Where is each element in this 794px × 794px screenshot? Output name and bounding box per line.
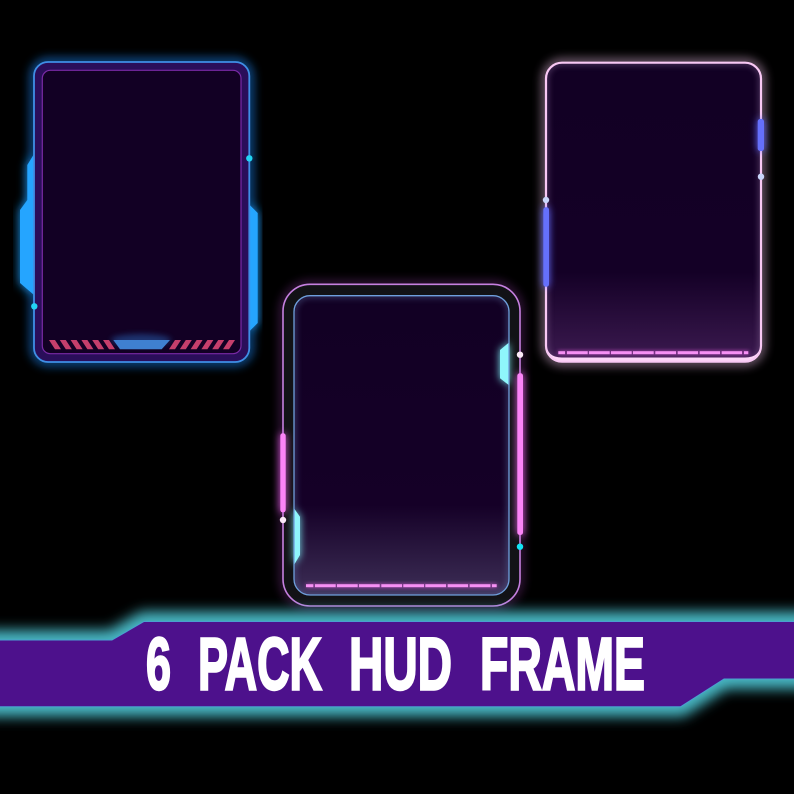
frame 2 left bar	[280, 433, 286, 512]
frame 3 dashed bottom line	[558, 351, 749, 354]
banner title text: FRAME	[480, 622, 645, 706]
frame 2 cyan left tab	[294, 508, 300, 565]
frame 1 centre bottom plate	[111, 334, 171, 349]
frame 2 cyan right tab	[500, 343, 509, 385]
frame 3 body	[546, 63, 761, 362]
frame 3 outline	[546, 63, 761, 362]
frame 1 left dot	[31, 303, 38, 309]
frame 3 left bar	[543, 207, 549, 287]
banner title text: HUD	[349, 622, 452, 706]
frame 1 body	[34, 62, 249, 362]
frame 1 outer glow	[34, 62, 249, 362]
frame 2 outer body	[283, 284, 520, 606]
frame 2 right cyan dot	[517, 544, 523, 550]
banner teal glow	[0, 622, 794, 707]
banner title text: 6	[146, 622, 171, 706]
frame 3 inner edge glow	[546, 63, 761, 362]
frame 1 inner panel	[42, 70, 241, 354]
banner purple band	[0, 622, 794, 707]
frame 3 left dot	[543, 197, 549, 203]
frame 2 inner edge glow	[294, 296, 509, 595]
frame 2 outer glow	[283, 284, 520, 606]
frame 2 right bar	[517, 373, 523, 535]
frame 1 left hazard stripes	[49, 340, 115, 349]
frame 3 right dot	[758, 174, 764, 180]
frame 2 inner panel	[294, 296, 509, 595]
frame 2: violet and blue HUD frame	[280, 284, 523, 606]
frame 2 dashed bottom line	[306, 584, 497, 588]
frame 3 outer glow	[546, 63, 761, 362]
frame 1 left side tabs	[20, 154, 34, 295]
frame 3 right bar	[758, 119, 764, 151]
frame 1 right hazard stripes	[169, 340, 235, 349]
banner title text: PACK	[198, 622, 322, 706]
frame 3 thick bottom edge	[546, 343, 761, 362]
frame 1: blue HUD frame	[20, 62, 258, 362]
title banner	[0, 622, 794, 707]
frame 1 right dot	[246, 155, 252, 162]
frame 2 left dot	[280, 517, 286, 523]
frame 1 right side tab	[249, 204, 258, 332]
banner title text	[146, 622, 645, 706]
frame 2 inner outline	[294, 296, 509, 595]
frame 3: pink HUD frame	[543, 63, 764, 362]
frame 2 right upper dot	[517, 352, 523, 358]
